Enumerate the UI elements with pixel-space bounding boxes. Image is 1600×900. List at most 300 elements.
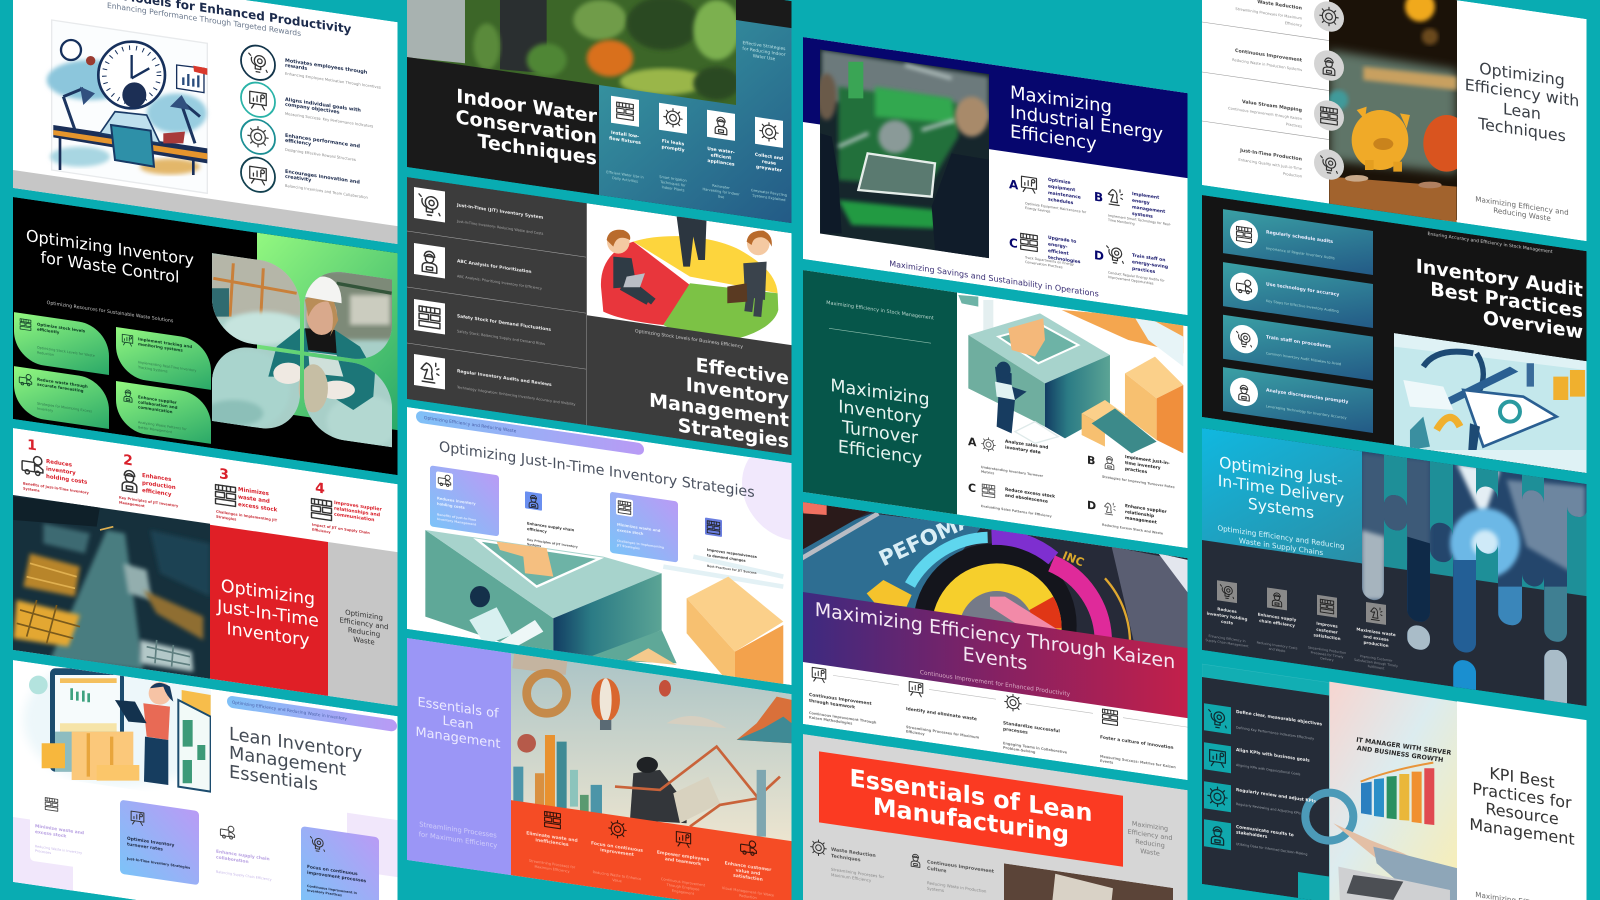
slide: incentive models: [13, 0, 399, 245]
text: strategy note: Effective Strategies: [743, 41, 785, 52]
text: row 1 detail: Enhancing Employee Motivation Through Incentives: [285, 72, 381, 90]
item: culture: Events: [1100, 759, 1113, 765]
illustration: pie chart with businessmen: [601, 217, 778, 343]
item: eliminate waste: Streamlining Processes for Maximum: [906, 725, 979, 740]
pill: subtitle: [227, 695, 397, 732]
card 4: continuous improvement: Inventory Practices: [307, 888, 342, 897]
title: Conservation: [456, 105, 597, 149]
item: standardize: [1003, 693, 1068, 759]
tip 4: [751, 116, 787, 202]
text: row 1: Motivates employees through: [285, 58, 367, 76]
option A: Optimize Equipment Maintenance for: [1025, 201, 1086, 214]
feature 2: Reducing Inventory Costs: [1257, 640, 1297, 650]
panel: blue title: [1202, 428, 1362, 563]
card 3: JIT Strategies: [616, 543, 640, 551]
strip: discrepancies: [1223, 367, 1373, 433]
item: eliminate waste: [906, 681, 980, 744]
panel: green title: Inventory: [838, 397, 922, 429]
row: waste reduction: Efficiency: [1285, 21, 1303, 28]
photo: performance gauge: PEFOMA: [875, 507, 978, 572]
item: eliminate waste: Identify and eliminate waste: [906, 706, 977, 722]
title: Indoor Water: [456, 84, 597, 128]
item: standardize: processes: [1003, 726, 1028, 736]
card 3: supply chain: [216, 824, 272, 882]
item: standardize: Standardize successful: [1003, 721, 1060, 735]
row: review: [1204, 781, 1316, 825]
item 2: Management: [119, 500, 145, 508]
panel: red title: Inventory: [226, 619, 310, 651]
panel: purple title: for Maximum Efficiency: [419, 830, 497, 850]
card 1: minimize waste: Minimize waste and: [35, 824, 84, 836]
item: waste reduction: Waste Reduction: [831, 848, 876, 859]
card 3: [610, 492, 678, 563]
row: objectives: Defining Key Performance Indicators Effectively: [1236, 725, 1314, 741]
card: forecasting: Strategies for Minimizing Excess: [37, 402, 92, 414]
feature 4: Fulfillment: [1368, 664, 1385, 671]
feature 4: and excess: [1363, 634, 1389, 642]
title: Techniques: [478, 129, 597, 170]
text: row 3: Enhances performance and: [285, 133, 360, 150]
feature 3: customer: [1316, 627, 1339, 635]
feature 4: Improving Customer: [1360, 654, 1392, 663]
item 4: communication: [334, 511, 374, 523]
tip 1: Daily Activities: [612, 176, 638, 184]
row: ABC: ABC Analysis: Prioritizing Inventory for Efficiency: [457, 274, 542, 291]
option D: Reducing Excess Stock and Waste: [1102, 523, 1164, 536]
strip: train staff: Common Inventory Audit Mistakes to Avoid: [1266, 351, 1341, 366]
benefit 4: satisfaction: [733, 873, 763, 883]
option C: Reduce excess stock: [1005, 488, 1055, 500]
feature 3: Delivery: [1320, 656, 1334, 662]
tip 4: Collect and: [755, 153, 783, 162]
strip: discrepancies: Analyze discrepancies promptly: [1266, 387, 1348, 405]
pill: subtitle: [416, 410, 644, 456]
row: JIT: [414, 187, 544, 237]
photo: warehouse aisle: [13, 495, 210, 679]
option D: Train staff on: [1132, 254, 1165, 263]
item 1: inventory: [46, 466, 76, 477]
row: audits: [414, 354, 575, 409]
card 4: [705, 518, 757, 575]
panel: grey subtitle: Optimizing: [345, 608, 383, 622]
option B: Implement Smart Technology for Real-: [1108, 214, 1171, 227]
card: tracking: Implementing Real-Time Inventory: [138, 360, 196, 373]
option B: systems: [1132, 211, 1153, 220]
feature 4: Satisfaction through Timely: [1354, 658, 1398, 668]
row: safety stock: [414, 299, 551, 350]
row: objectives: Define clear, measurable objectives: [1236, 709, 1323, 728]
pill: subtitle: Optimizing Efficiency and Reducing Waste in Inventory: [232, 699, 348, 721]
card: supplier collaboration: Enhance supplier: [138, 394, 177, 405]
option D: management: [1125, 515, 1157, 526]
card 2: Key Principles of JIT Inventory: [527, 538, 578, 549]
item 4: Improves supplier: [334, 501, 382, 513]
subtitle: Ensuring Accuracy and Efficiency in Stock Management: [1428, 231, 1553, 255]
option D: D: [1087, 499, 1096, 513]
feature 2: chain efficiency: [1259, 618, 1295, 628]
card 4: continuous improvement: Continuous Improvement in: [307, 884, 357, 895]
benefit 3: Continuous Improvement: [661, 877, 705, 888]
item 3: Strategies: [216, 515, 236, 522]
icon: goals: [241, 80, 275, 119]
row: JIT: Just-In-Time Inventory: Reducing Waste and Costs: [456, 219, 544, 236]
option D: energy-saving: [1132, 259, 1168, 270]
row: ABC: ABC Analysis for Prioritization: [457, 258, 532, 275]
panel: green title: [803, 270, 957, 514]
benefit 1: [526, 809, 578, 875]
item: continuous improvement: Reducing Waste in Production: [927, 880, 986, 894]
photo: garden and water tanks: [407, 0, 740, 113]
row: communicate: Communicate results to: [1236, 825, 1294, 838]
panel: red title: Optimizing: [221, 576, 315, 610]
benefit 3: Empower employees: [657, 850, 709, 863]
item: continuous improvement: [911, 854, 995, 900]
card 2: Enhances supply chain: [527, 522, 574, 532]
panel: blue title: Optimizing Just-: [1219, 453, 1343, 490]
row: safety stock: Safety Stock for Demand Fluctuations: [457, 313, 551, 333]
tip 3: Use: [718, 194, 724, 199]
tip 2: [659, 103, 687, 193]
panel: blue title: Waste in Supply Chains: [1239, 536, 1323, 557]
card 3: Minimizes waste and: [617, 523, 660, 533]
footer subtitle: Maximizing Savings and Sustainability in Operations: [889, 259, 1099, 299]
strip: technology: Use technology for accuracy: [1266, 281, 1339, 298]
option B: Time Monitoring: [1107, 218, 1135, 226]
benefit 1: Maximum Efficiency: [534, 865, 570, 874]
option B: practices: [1125, 466, 1148, 475]
panel: purple title: Lean: [443, 714, 473, 733]
tip 2: Fix leaks: [662, 139, 684, 147]
tip 4: greywater: [756, 164, 783, 174]
item: teamwork: Continuous Improvement Through: [809, 711, 876, 725]
text: row 1: rewards: [285, 63, 307, 72]
feature 1: Enhancing Efficiency in: [1209, 634, 1245, 643]
item 4: [310, 482, 382, 534]
benefit 4: Reduction: [739, 894, 757, 900]
slide: essentials of lean manufacturing: [803, 734, 1189, 900]
title: Essentials: [229, 762, 318, 796]
panel: green title: Efficiency: [838, 437, 922, 469]
panel: white title: Resource: [1485, 799, 1559, 829]
benefit 3: Through Employee: [666, 883, 699, 892]
option A: [968, 433, 1048, 483]
row: review: Regularly review and adjust KPIs: [1236, 787, 1316, 805]
option C: Evaluating Sales Patterns for Efficiency: [981, 504, 1053, 518]
photo: performance gauge: INC: [1061, 548, 1086, 569]
item 2: 2: [123, 452, 133, 469]
row: continuous improvement: Continuous Improvement: [1235, 48, 1303, 64]
photo: performance gauge: [802, 444, 1188, 763]
item 4: 4: [315, 480, 325, 498]
icon: motivation: [241, 43, 275, 82]
item 1: Systems: [23, 486, 40, 493]
slide: lean inventory essentials: [13, 660, 398, 900]
tip 2: Indoor Plants: [662, 185, 685, 193]
banner: title: Continuous Improvement for Enhanced Productivity: [920, 670, 1071, 698]
row: ABC: [414, 243, 542, 293]
card 1: minimize waste: [30, 797, 84, 867]
item: continuous improvement: Continuous Improvement: [927, 860, 994, 875]
panel: red title: Just-In-Time: [216, 597, 319, 632]
benefit 3: [657, 829, 709, 898]
photo: manager with growth chart: AND BUSINESS GROWTH: [1356, 745, 1444, 764]
text: strategy note: Water Use: [753, 53, 776, 62]
option B: B: [1087, 454, 1095, 468]
card 2: turnover: Optimize Inventory: [127, 837, 174, 849]
card 1: Inventory Management: [437, 517, 477, 527]
text: row 4 detail: Balancing Incentives and Team Collaboration: [285, 184, 369, 200]
item 3: excess stock: [238, 502, 278, 514]
tip 3: Use water-: [707, 147, 735, 156]
card 1: Reduces inventory: [437, 496, 476, 506]
slide: industrial energy efficiency: [803, 15, 1189, 325]
option D: practices: [1132, 266, 1156, 275]
option C: C: [968, 481, 976, 495]
title: Optimizing: [1479, 59, 1565, 90]
slide: just-in-time strategies isometric: [407, 384, 842, 751]
row: waste reduction: Waste Reduction: [1257, 0, 1302, 12]
tip 4: Greywater Recycling: [751, 188, 787, 197]
row: just-in-time: Just-In-Time Production: [1239, 147, 1302, 163]
option A: A: [968, 435, 977, 449]
panel: grey subtitle: Efficiency and: [340, 615, 388, 631]
card 3: excess stock: [617, 528, 644, 536]
strip: schedule audits: Regularly schedule audits: [1266, 229, 1333, 245]
row: communicate: Utilizing Data for Informed Decision-Making: [1236, 842, 1307, 856]
benefit 2: improvement: [600, 847, 635, 858]
item 3: waste and: [238, 494, 270, 505]
row: value stream: [1228, 86, 1344, 135]
illustration: isometric audit board: [1394, 319, 1588, 478]
text: strategy note: for Reducing Indoor: [742, 46, 786, 58]
item 4: Efficiency: [312, 528, 331, 534]
icon: innovation: [241, 155, 275, 194]
option A: Understanding Inventory Turnover: [981, 465, 1043, 478]
benefit 2: Value: [612, 878, 622, 883]
item: standardize: Engaging Teams in Collaborative: [1003, 741, 1067, 755]
feature 2: [1257, 586, 1298, 655]
card 2: turnover: turnover rates: [127, 841, 163, 853]
tip 3: appliances: [707, 158, 735, 168]
slide: effective inventory strategies: [407, 162, 793, 455]
tip 4: reuse: [762, 159, 776, 167]
panel: white title: Management: [1469, 815, 1575, 849]
strip: train staff: [1223, 315, 1373, 381]
title: for Waste Control: [40, 248, 180, 287]
item: waste reduction: Techniques: [831, 853, 861, 863]
tip 1: flow fixtures: [609, 136, 641, 146]
slide: inventory for waste control: [13, 197, 398, 475]
slide: indoor water conservation: [407, 0, 793, 223]
card: tracking: [116, 327, 211, 390]
side note: Waste: [1140, 847, 1160, 858]
card: stock levels: Optimize stock levels: [37, 322, 85, 334]
illustration: isometric warehouse: [958, 295, 1183, 453]
slide: inventory turnover efficiency: [803, 239, 1189, 548]
item 2: Key Principles of JIT Inventory: [119, 495, 178, 508]
card 2: turnover: [120, 800, 199, 885]
card: supplier collaboration: collaboration and: [138, 399, 178, 410]
photo: warehouse digital network in pill masks: [1357, 406, 1590, 747]
option A: Optimize: [1048, 178, 1071, 186]
option A: equipment: [1048, 183, 1076, 193]
item 4: Impact of JIT on Supply Chain: [312, 523, 370, 535]
photo: engineers with green machinery: [815, 17, 995, 296]
item: teamwork: Kaizen Methodologies: [809, 715, 852, 726]
item: waste reduction: [811, 839, 884, 885]
row: KPIs: Align KPIs with business goals: [1236, 747, 1310, 764]
text: row 4: creativity: [285, 174, 312, 184]
row: value stream: Practices: [1286, 122, 1302, 129]
row: KPIs: Aligning KPIs with Organizational Goals: [1236, 763, 1301, 776]
title: Industrial Energy: [1010, 102, 1163, 145]
slide: just-in-time delivery systems: [1202, 383, 1590, 747]
benefit 1: Eliminate waste and: [526, 831, 578, 844]
slide: just-in-time inventory red: [13, 428, 398, 706]
option A: [1009, 171, 1087, 219]
banner: title: Maximizing Efficiency Through Kaizen: [815, 598, 1175, 673]
feature 1: Supply Chain Management: [1206, 638, 1249, 648]
banner: title: Events: [963, 642, 1027, 675]
slide: inventory audit best practices: [1202, 195, 1588, 478]
row: review: Regularly Reviewing and Adjusting KPIs: [1236, 802, 1301, 815]
feature 3: Streamlining Production: [1308, 645, 1346, 655]
benefit 4: Visual Management for Waste: [722, 886, 774, 898]
card: stock levels: Optimizing Stock Levels for Waste: [37, 346, 95, 358]
panel: blue title: Systems: [1248, 494, 1314, 522]
card 2: turnover: Just-In-Time Inventory Strategies: [126, 857, 190, 870]
benefit 4: value and: [736, 867, 760, 877]
text: row 2: company objectives: [285, 102, 340, 116]
row: just-in-time: Enhancing Quality with Just-in-Time: [1238, 158, 1302, 171]
benefit 2: [591, 817, 643, 886]
card 3: Challenges in Implementing: [617, 539, 664, 550]
option B: Implement just-in-: [1125, 455, 1170, 467]
panel: purple title: Streamlining Processes: [419, 820, 497, 840]
title: Lean: [1503, 99, 1541, 123]
option D: relationship: [1125, 509, 1154, 519]
tip 2: Techniques for: [659, 180, 686, 188]
strip: schedule audits: [1223, 209, 1373, 275]
option D: Conduct Regular Energy Audits for: [1108, 271, 1165, 283]
feature 3: Improves: [1316, 621, 1338, 629]
card 3: supply chain: Enhance supply chain: [216, 850, 270, 862]
card: tracking: Tracking Systems: [137, 365, 168, 374]
option B: Strategies for Improving Turnover Rates: [1102, 475, 1175, 489]
option C: Conservation Practices: [1025, 260, 1063, 269]
card 1: minimize waste: Processes: [35, 849, 51, 855]
option D: [1087, 497, 1168, 536]
title: Lean Inventory: [229, 724, 362, 764]
title: Efficiency: [1010, 121, 1097, 155]
row: continuous improvement: Reducing Waste in Production Systems: [1232, 58, 1302, 72]
item 3: [214, 468, 278, 522]
photo: manager with growth chart: [1305, 682, 1457, 900]
option C: [968, 481, 1055, 519]
card 1: [430, 465, 499, 536]
item 2: [119, 454, 178, 508]
feature 2: and Waste: [1269, 647, 1285, 653]
panel: grey subtitle: Reducing: [348, 625, 380, 639]
row: just-in-time: Production: [1283, 172, 1302, 179]
feature 1: Reduces: [1217, 606, 1237, 614]
feature 3: satisfaction: [1313, 632, 1341, 641]
item: teamwork: through teamwork: [809, 698, 856, 711]
tip 1: [606, 95, 644, 185]
strip: technology: [1223, 262, 1373, 328]
row: value stream: Continuous Improvement through Kaizen: [1228, 106, 1302, 121]
text: row 3: efficiency: [285, 138, 312, 148]
tip 4: Systems Explained: [752, 193, 786, 202]
item: continuous improvement: Systems: [927, 886, 944, 893]
panel: blue title: In-Time Delivery: [1218, 471, 1344, 508]
title: Management: [229, 743, 346, 781]
photo: clipboard on desk: [1004, 863, 1173, 900]
panel: white title: Practices for: [1472, 779, 1572, 813]
row: communicate: stakeholders: [1236, 829, 1268, 840]
card: stock levels: [14, 312, 109, 375]
illustration: clock and worker: [47, 20, 207, 193]
subtitle: Optimizing Resources for Sustainable Waste Solutions: [47, 300, 174, 324]
option B: [1087, 448, 1175, 489]
option B: management: [1132, 204, 1166, 215]
item 1: Reduces: [46, 459, 72, 469]
option D: [1094, 244, 1168, 288]
item 3: Minimizes: [238, 487, 269, 497]
card: forecasting: [14, 366, 109, 429]
option A: maintenance: [1048, 190, 1081, 201]
illustration: woman with tablet and shelves: [23, 666, 211, 793]
icon: performance: [241, 117, 275, 156]
row: audits: Technology Integration: Enhancing Inventory Accuracy and Visibility: [456, 385, 575, 407]
panel: green title: Turnover: [841, 418, 919, 449]
benefit 2: Reducing Waste to Enhance: [593, 870, 641, 881]
option C: Upgrade to: [1048, 236, 1076, 245]
option C: [1009, 229, 1081, 272]
slide: kaizen events: [802, 444, 1189, 780]
row: continuous improvement: [1232, 36, 1344, 83]
illustration: isometric warehouse: [425, 530, 783, 690]
photo: manager with growth chart: IT MANAGER WITH SERVER: [1356, 737, 1452, 757]
title: Efficiency with: [1465, 75, 1579, 111]
feature 1: costs: [1221, 619, 1234, 626]
title: Effective: [696, 353, 789, 390]
item: standardize: Problem-Solving: [1003, 746, 1036, 754]
pill: subtitle: Optimizing Efficiency and Reducing Waste: [424, 415, 517, 435]
row: waste reduction: [1235, 0, 1344, 34]
item 2: production: [142, 480, 176, 491]
title: Inventory: [686, 373, 790, 411]
feature 4: [1354, 600, 1398, 673]
option B: time inventory: [1125, 460, 1161, 471]
card: supplier collaboration: [116, 381, 211, 444]
title: Optimizing Just-In-Time Inventory Strategies: [439, 439, 755, 501]
strip: technology: Key Steps for Effective Inventory Auditing: [1266, 299, 1339, 313]
panel: orange benefits: [511, 800, 793, 900]
item 2: Enhances: [142, 473, 171, 483]
card: supplier collaboration: Better Management: [138, 425, 173, 434]
feature 2: Enhances supply: [1258, 612, 1296, 622]
slide: KPI best practices: [1202, 644, 1588, 900]
card: forecasting: Reduce waste through: [37, 377, 88, 389]
item 4: relationships and: [334, 506, 380, 518]
panel: grey subtitle: Waste: [353, 635, 375, 647]
option D: Enhance supplier: [1125, 504, 1167, 515]
option A: A: [1009, 177, 1019, 193]
item: eliminate waste: Efficiency: [906, 730, 925, 736]
option B: [1094, 186, 1172, 231]
option A: inventory data: [1005, 445, 1041, 456]
